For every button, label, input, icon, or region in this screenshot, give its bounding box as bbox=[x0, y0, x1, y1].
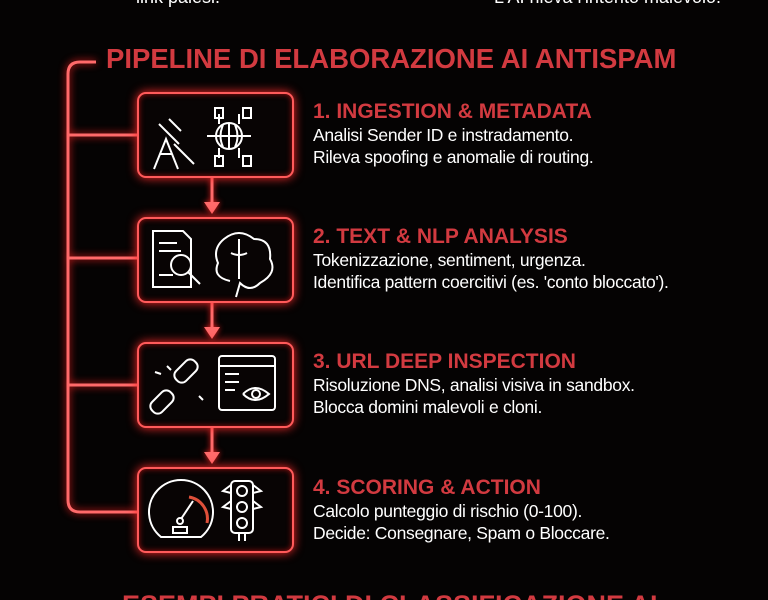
step 2 text: Tokenizzazione, sentiment, urgenza. bbox=[313, 250, 586, 270]
step 4 text: Calcolo punteggio di rischio (0-100). bbox=[313, 501, 582, 521]
step 1 heading: 1. INGESTION & METADATA bbox=[313, 100, 592, 123]
title: PIPELINE DI ELABORAZIONE AI ANTISPAM bbox=[106, 43, 676, 74]
step 1 text: Rileva spoofing e anomalie di routing. bbox=[313, 147, 593, 167]
step 4 box bbox=[137, 467, 294, 553]
step 3 text: Blocca domini malevoli e cloni. bbox=[313, 397, 542, 417]
step 2 heading: 2. TEXT & NLP ANALYSIS bbox=[313, 225, 568, 248]
step 4 heading: 4. SCORING & ACTION bbox=[313, 476, 541, 499]
step 4 text: Decide: Consegnare, Spam o Bloccare. bbox=[313, 523, 610, 543]
arrows bbox=[204, 178, 220, 464]
step 2 box bbox=[137, 217, 294, 303]
step 3 text bbox=[313, 375, 635, 417]
step 1 box bbox=[137, 92, 294, 178]
step 4 text bbox=[313, 501, 610, 543]
step 3 text: Risoluzione DNS, analisi visiva in sandbox. bbox=[313, 375, 635, 395]
step 3 heading: 3. URL DEEP INSPECTION bbox=[313, 350, 576, 373]
step 1 text bbox=[313, 125, 593, 167]
step 2 text bbox=[313, 250, 669, 292]
step 3 box bbox=[137, 342, 294, 428]
step 2 text: Identifica pattern coercitivi (es. 'conto bloccato'). bbox=[313, 272, 669, 292]
step 1 text: Analisi Sender ID e instradamento. bbox=[313, 125, 573, 145]
